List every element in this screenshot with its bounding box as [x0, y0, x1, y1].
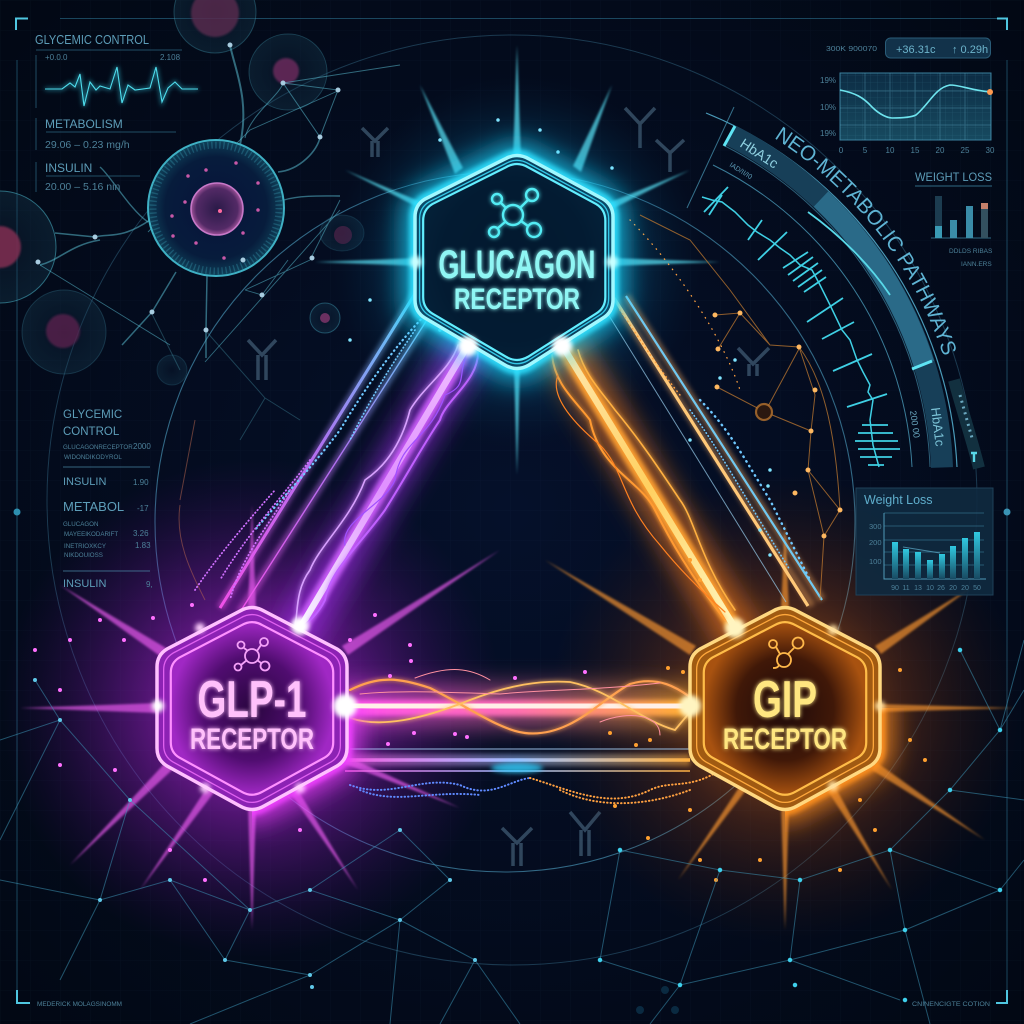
cell: small right	[157, 215, 364, 385]
cell: upper right	[249, 34, 327, 110]
panel: arc hud with title	[686, 106, 985, 470]
main neuron cell	[148, 140, 284, 276]
footer labels: MEDERICK MOLAGSINOMM	[37, 1001, 122, 1008]
panel: data table left: CONTROL	[63, 426, 120, 438]
stat pill: 300K 900070	[826, 44, 877, 53]
label: glucagon: GLUCAGON	[438, 243, 596, 287]
network connections	[40, 45, 400, 440]
slider widget	[954, 380, 979, 468]
panel: weight loss bar chart: 13	[914, 585, 922, 592]
metric: insulin: INSULIN	[45, 161, 92, 175]
right rail	[608, 296, 822, 606]
label: receptor: RECEPTOR	[190, 723, 314, 756]
beam: GLP-1 to GIP	[345, 670, 690, 735]
footer labels	[37, 1001, 990, 1008]
particle dust	[35, 120, 925, 880]
chart: hba1c trend: 19%	[820, 76, 836, 85]
panel: glycemic readouts top-left: 20.00 – 5.16 nin	[45, 181, 120, 193]
panel: data table left: INETRIOXKCY	[64, 543, 106, 550]
panel: data table left: 1.83	[135, 541, 151, 550]
hexagon: GLP-1 receptor	[157, 608, 347, 810]
orange network	[179, 215, 840, 600]
metric: metabolism: METABOLISM	[45, 117, 123, 131]
panel: weight loss bar chart	[856, 488, 993, 595]
panel: data table left: NIKDOUIOSS	[64, 552, 103, 559]
chart: hba1c trend: 10%	[820, 103, 836, 112]
panel: data table left: GLUCAGONRECEPTOR	[63, 444, 133, 451]
hexagon: GIP receptor	[690, 608, 880, 810]
hba1c band	[724, 126, 942, 468]
stat pill: +36.31c	[896, 44, 936, 56]
chart: waveform	[702, 187, 900, 467]
network nodes	[35, 650, 1000, 1010]
title: neo-metabolic pathways: NEO-METABOLIC PATHWAYS	[775, 126, 956, 354]
panel: glycemic readouts top-left	[35, 33, 198, 193]
icon: molecule	[769, 638, 804, 668]
panel: weight loss bar chart: 26	[937, 585, 945, 592]
cell: lower left	[22, 290, 106, 374]
hud arcs	[687, 107, 957, 467]
panel: weight loss bar chart: 10	[926, 585, 934, 592]
chart: hba1c trend	[820, 73, 995, 155]
panel: weight loss small bars	[915, 170, 993, 268]
label: hba1c bottom: HbA1c	[928, 407, 948, 448]
panel: data table left: METABOL	[63, 499, 124, 514]
panel: data table left: WIDONDIKODYROL	[64, 454, 122, 461]
panel: data table left: 9,	[146, 580, 153, 589]
panel: glycemic readouts top-left: +0.0.0	[45, 53, 68, 62]
panel: weight loss bar chart: 20	[949, 585, 957, 592]
cell: top	[174, 0, 256, 53]
panel: data table left	[63, 409, 153, 590]
heading: glycemic control: GLYCEMIC CONTROL	[35, 33, 149, 47]
icons: antibody receptors	[248, 108, 769, 866]
panel: data table left: 3.26	[133, 529, 149, 538]
chart: hba1c trend: 19%	[820, 129, 836, 138]
icon: molecule	[489, 189, 541, 237]
panel: data table left: -17	[137, 504, 149, 513]
panel: weight loss small bars: IANN.ERS	[961, 261, 992, 268]
neural cells and network	[0, 0, 400, 440]
icon: molecule	[234, 638, 270, 670]
panel: weight loss small bars: DDLDS RIBAS	[949, 248, 993, 255]
bottom network	[0, 640, 1024, 1024]
nodes	[38, 45, 338, 330]
label: GIP: GIP	[753, 671, 817, 729]
cell: left edge	[0, 191, 56, 303]
panel: weight loss bar chart: Weight Loss	[864, 493, 933, 507]
triangle guide rails	[220, 292, 822, 773]
panel: data table left: 1.90	[133, 478, 149, 487]
bottom rail	[345, 749, 690, 773]
panel: glycemic readouts top-left: 29.06 – 0.23 mg/h	[45, 139, 130, 151]
hexagon: glucagon receptor	[415, 156, 613, 368]
footer labels: CNINENCIGTE COTION	[912, 1001, 990, 1008]
beam: glucagon to GIP	[552, 345, 735, 628]
left rail	[220, 292, 432, 612]
panel: weight loss bar chart: 200	[869, 538, 882, 547]
label: GLP-1: GLP-1	[198, 671, 306, 729]
stat pill: ↑ 0.29h	[952, 44, 988, 56]
panel: weight loss bar chart: 100	[869, 557, 882, 566]
stat pill	[826, 38, 990, 58]
panel: data table left: MAYEEIKODARIFT	[64, 531, 118, 538]
panel: weight loss bar chart: 11	[902, 585, 910, 592]
panel: weight loss bar chart: 50	[973, 585, 981, 592]
chart: hba1c trend: 20	[936, 146, 945, 155]
label: receptor: RECEPTOR	[454, 283, 580, 316]
chart: ecg trace	[36, 50, 198, 192]
panel: data table left: INSULIN	[63, 476, 106, 488]
panel: data table left: 2000	[133, 442, 151, 451]
label: value 200: 200 00	[908, 410, 922, 439]
chart: hba1c trend: 0	[839, 146, 844, 155]
chart: hba1c trend: 10	[886, 146, 895, 155]
label: small arc values: IAD/II/I0	[728, 162, 753, 181]
panel: data table left: INSULIN	[63, 578, 106, 590]
panel: weight loss bar chart: 90	[891, 585, 899, 592]
panel: weight loss bar chart: 300	[869, 522, 882, 531]
chart: hba1c trend: 5	[863, 146, 868, 155]
panel: line chart top-right	[820, 38, 995, 155]
panel: glycemic readouts top-left: 2.108	[160, 53, 181, 62]
chart: hba1c trend: 30	[986, 146, 995, 155]
chart: hba1c trend: 25	[961, 146, 970, 155]
label: receptor: RECEPTOR	[723, 723, 847, 756]
panel: weight loss bar chart: 20	[961, 585, 969, 592]
label: hba1c top: HbA1c	[737, 135, 781, 171]
panel: weight loss small bars: WEIGHT LOSS	[915, 170, 992, 184]
panel: data table left: GLUCAGON	[63, 521, 98, 528]
junction flares	[152, 256, 885, 793]
panel: data table left: GLYCEMIC	[63, 409, 122, 421]
beam: GLP-1 to glucagon	[295, 345, 478, 628]
chart: hba1c trend: 15	[911, 146, 920, 155]
